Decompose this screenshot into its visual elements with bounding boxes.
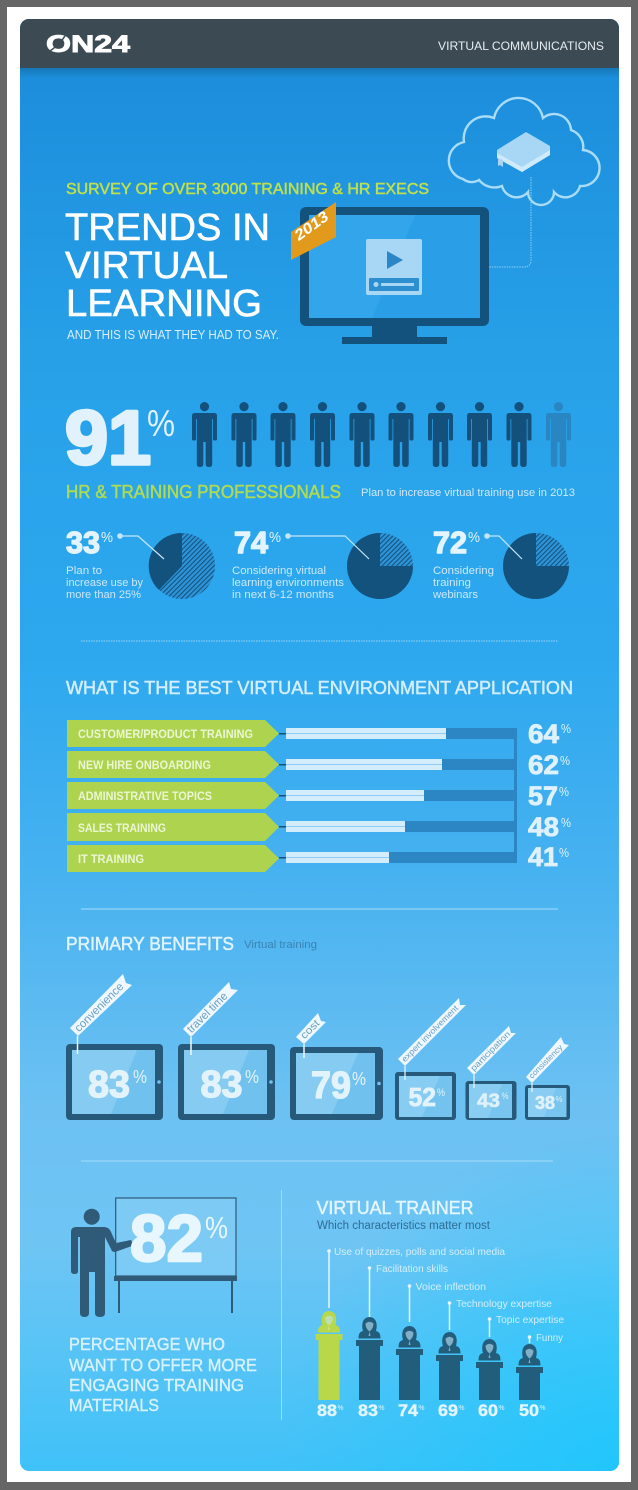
description: Considering virtual [232,565,326,577]
tablet: convenience 83 percent: % [133,1067,147,1087]
panel: 33 percent pie [66,525,215,601]
row: it training: 41 [528,842,558,872]
description: webinars [432,589,479,601]
description [66,565,143,601]
panel: 72 percent pie [432,525,569,601]
tablet: expert involvement 52 percent: expert involvement [399,1003,461,1064]
description: increase use by [66,577,143,589]
value: 33 [66,525,100,560]
podium: voice inflection 74 percent: 74 [398,1401,419,1420]
value: % [101,529,113,546]
panel: 82 percent engaging materials [69,1198,257,1415]
pie chart [149,533,215,599]
tablet: participation 43 percent: participation [468,1029,512,1073]
tablet: expert involvement 52 percent: 52 [408,1082,436,1112]
podium: funny 50 percent: % [540,1405,546,1412]
description [432,565,494,601]
subheading: Which characteristics matter most [317,1220,491,1232]
row: new hire onboarding: % [560,753,570,768]
row: sales training: % [561,815,571,830]
row: sales training [67,812,571,842]
value: % [468,529,480,546]
track spine [514,728,517,863]
tablet: cost 79 percent: 79 [311,1065,351,1107]
description: more than 25% [66,589,141,601]
description: ENGAGING TRAINING [69,1375,244,1395]
podium: funny 50 percent [516,1332,564,1420]
tablet: convenience 83 percent: convenience [73,981,126,1035]
tablet: participation 43 percent [466,1026,516,1120]
value: 82 [130,1201,203,1275]
row: new hire onboarding [67,750,570,780]
podium: quizzes 88 percent: % [338,1405,344,1412]
tablet: travel time 83 percent: 83 [200,1064,242,1106]
tablet: convenience 83 percent [66,974,163,1120]
survey kicker: SURVEY OF OVER 3000 TRAINING & HR EXECS [66,181,429,198]
bar chart [67,719,571,872]
panel: 74 percent pie [232,525,413,601]
panel: primary benefits [66,934,570,1120]
big number: 91 [65,396,151,481]
description: PERCENTAGE WHO [69,1334,225,1354]
main title: TRENDS IN [65,207,270,249]
tablet: cost 79 percent: cost [298,1018,322,1042]
heading: VIRTUAL TRAINER [316,1198,474,1218]
icon: monitor with video player [300,207,489,344]
row: it training: % [559,845,569,860]
hero illustration [290,98,600,344]
pointer [487,536,522,559]
description: WANT TO OFFER MORE [69,1355,257,1375]
row: sales training: 48 [528,812,559,842]
heading: WHAT IS THE BEST VIRTUAL ENVIRONMENT APPLICATION [66,678,573,698]
tablet: expert involvement 52 percent [395,998,466,1120]
icon: presenter at whiteboard [71,1198,237,1317]
row: customer product training: CUSTOMER/PRODUCT TRAINING [78,729,253,741]
row: new hire onboarding: 62 [528,750,559,780]
value: 72 [433,525,467,560]
podium: facilitation 83 percent: 83 [358,1401,378,1420]
heading: PRIMARY BENEFITS [66,934,234,954]
description [69,1334,257,1415]
podium: technology expertise 69 percent: % [458,1405,464,1412]
row: customer product training: 64 [528,719,559,749]
podium: quizzes 88 percent: 88 [317,1401,337,1420]
panel: best virtual environment application [66,678,573,872]
heading: HR & TRAINING PROFESSIONALS [66,482,341,502]
description: Considering [433,565,494,577]
row: administrative topics [67,781,569,811]
tablet: travel time 83 percent: travel time [185,990,230,1036]
panel: 91 percent statistic [65,396,575,502]
podium: technology expertise 69 percent [436,1298,552,1420]
row: it training [67,842,569,872]
podium: funny 50 percent: Funny [536,1332,564,1344]
tablet: consistency 38 percent: 38 [535,1093,555,1113]
caption: Plan to increase virtual training use in 2013 [361,487,575,499]
tablet: consistency 38 percent: consistency [527,1043,565,1080]
main title: LEARNING [66,283,262,325]
connector line [484,177,531,267]
description: training [433,577,471,589]
header bar [46,31,604,58]
podium: quizzes 88 percent: Use of quizzes, polls and social media [334,1246,505,1258]
podium: facilitation 83 percent: Facilitation skills [376,1263,448,1275]
main title [65,207,270,325]
podium: voice inflection 74 percent: % [418,1405,424,1412]
big number: % [147,403,175,444]
header tagline: VIRTUAL COMMUNICATIONS [438,39,604,53]
row: administrative topics: 57 [528,781,558,811]
podium: facilitation 83 percent [356,1263,448,1420]
row: sales training: SALES TRAINING [78,823,166,835]
main title: VIRTUAL [65,245,228,287]
podium: voice inflection 74 percent: Voice inflection [416,1281,486,1293]
value: 74 [234,525,269,560]
tablet: consistency 38 percent [525,1037,570,1120]
tablet: cost 79 percent: % [352,1069,366,1089]
tablet: consistency 38 percent: % [556,1094,563,1104]
people pictogram [192,402,571,467]
podium: funny 50 percent: 50 [519,1401,539,1420]
subtitle: AND THIS IS WHAT THEY HAD TO SAY. [67,328,279,342]
description: in next 6-12 months [232,589,335,601]
podium: facilitation 83 percent: % [378,1405,384,1412]
row: it training: IT TRAINING [78,854,144,866]
pointer [120,536,164,559]
podium: topic expertise 60 percent: 60 [478,1401,498,1420]
value: % [205,1210,228,1245]
tablet: travel time 83 percent: % [245,1067,259,1087]
podium: technology expertise 69 percent: 69 [438,1401,458,1420]
podium: technology expertise 69 percent: Technology expertise [456,1298,552,1310]
row: customer product training [67,719,571,749]
row: administrative topics: ADMINISTRATIVE TOPICS [78,791,212,803]
description [232,565,345,601]
tablet: participation 43 percent: 43 [477,1091,500,1112]
podium: voice inflection 74 percent [396,1281,486,1420]
panel: virtual trainer [316,1198,564,1420]
icon: cloud with book [449,98,600,205]
row: new hire onboarding: NEW HIRE ONBOARDING [78,760,211,772]
tablet: cost 79 percent [290,1013,383,1120]
podium: topic expertise 60 percent: % [498,1405,504,1412]
title block [65,181,429,342]
row: customer product training: % [561,721,571,736]
tablet: expert involvement 52 percent: % [437,1087,445,1099]
podium: topic expertise 60 percent [476,1314,564,1420]
value: % [269,529,281,546]
description: MATERIALS [69,1395,159,1415]
podium: quizzes 88 percent [316,1246,505,1420]
ribbon: 2013: 2013 [290,208,333,245]
description: Plan to [66,565,102,577]
pie chart [503,533,569,599]
ribbon: 2013 [290,202,336,260]
tablet: participation 43 percent: % [502,1091,508,1101]
tablet: travel time 83 percent [178,982,275,1120]
description: learning environments [232,577,345,589]
tablet: convenience 83 percent: 83 [88,1064,130,1106]
pointer [288,536,369,559]
subheading: Virtual training [244,939,317,951]
logo: ON24 [46,31,131,58]
podium: topic expertise 60 percent: Topic expertise [496,1314,564,1326]
pie chart [347,533,413,599]
row: administrative topics: % [559,784,569,799]
